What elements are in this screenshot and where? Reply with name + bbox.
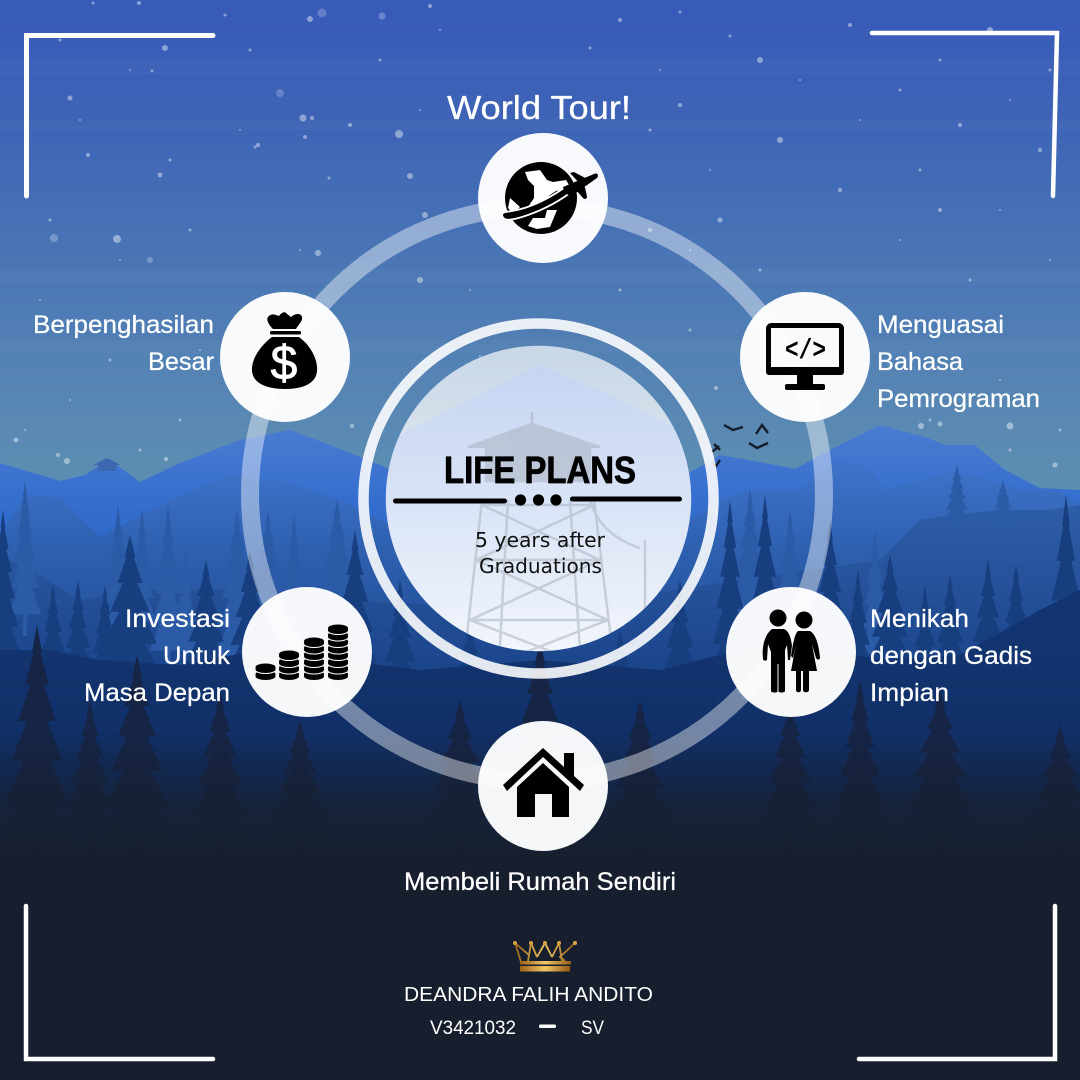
label: Investasi [125,605,230,633]
corner bracket: top left [26,36,213,196]
node disc [242,587,372,717]
node disc [220,292,350,422]
birds [712,425,768,466]
icon: monitor with code [766,326,844,390]
node: Membeli Rumah Sendiri [404,721,676,896]
student id: V3421032 [430,1017,516,1039]
heading: World Tour: World Tour! [447,89,631,126]
label: Untuk [163,642,231,670]
label [33,311,214,376]
label [877,311,1040,413]
label: Masa Depan [84,679,230,707]
background: deep blue forest band [0,590,1080,860]
node: Berpenghasilan Besar [33,292,350,422]
background: third ridge [0,505,1080,780]
background: stars [14,1,1062,468]
label: Impian [870,679,949,707]
title divider [393,494,682,506]
author name: DEANDRA FALIH ANDITO [404,983,653,1006]
node disc [478,133,608,263]
label: Besar [148,348,214,376]
title: LIFE PLANS [444,450,636,492]
node disc [726,587,856,717]
background: dark foreground trees [0,625,1080,885]
background: dark ground fade [0,730,1080,1080]
label: Bahasa [877,348,963,376]
node disc [740,292,870,422]
label: Pemrograman [877,385,1040,413]
footer credit [404,941,653,1039]
central hub [358,318,719,679]
background: pagoda silhouette [93,458,121,471]
subtitle: 5 years after [475,528,606,552]
label: Menguasai [877,311,1004,339]
corner bracket: bottom left [26,906,213,1059]
node: Menguasai Bahasa Pemrograman [740,292,1040,422]
node disc [478,721,608,851]
hub outer ring [364,324,714,674]
hub: faint lookout tower [466,412,646,651]
icon: crown [513,941,577,972]
icon: coin stacks [255,624,348,680]
background: mid conifer trees [9,465,1017,682]
label: Menikah [870,605,969,633]
outer connecting ring [250,207,824,781]
background: near conifer trees [0,495,1080,781]
hub inner disc [386,346,691,651]
icon: globe and plane [502,162,598,234]
background: second ridge [0,460,1080,760]
icon: couple [763,610,820,692]
node: Menikah dengan Gadis Impian [726,587,1032,717]
icon: money bag: $ [271,337,297,390]
corner bracket: top right [872,33,1057,196]
label [84,605,231,707]
label [870,605,1032,707]
label: Membeli Rumah Sendiri [404,868,676,896]
subtitle: Graduations [479,554,602,578]
corner bracket: bottom right [859,906,1055,1059]
background: night sky [0,0,1080,620]
label: Berpenghasilan [33,311,214,339]
icon: monitor with code: </> [785,336,826,367]
icon: house [503,748,584,817]
dash [539,1024,556,1028]
node: Investasi Untuk Masa Depan [84,587,372,717]
icon: money bag [252,312,317,390]
background: blue mountain range [0,425,1080,720]
subtitle [475,528,606,578]
node: World Tour [447,89,631,263]
program: SV [581,1017,604,1039]
hub: pale peak behind disc [388,366,689,652]
label: dengan Gadis [870,642,1032,670]
